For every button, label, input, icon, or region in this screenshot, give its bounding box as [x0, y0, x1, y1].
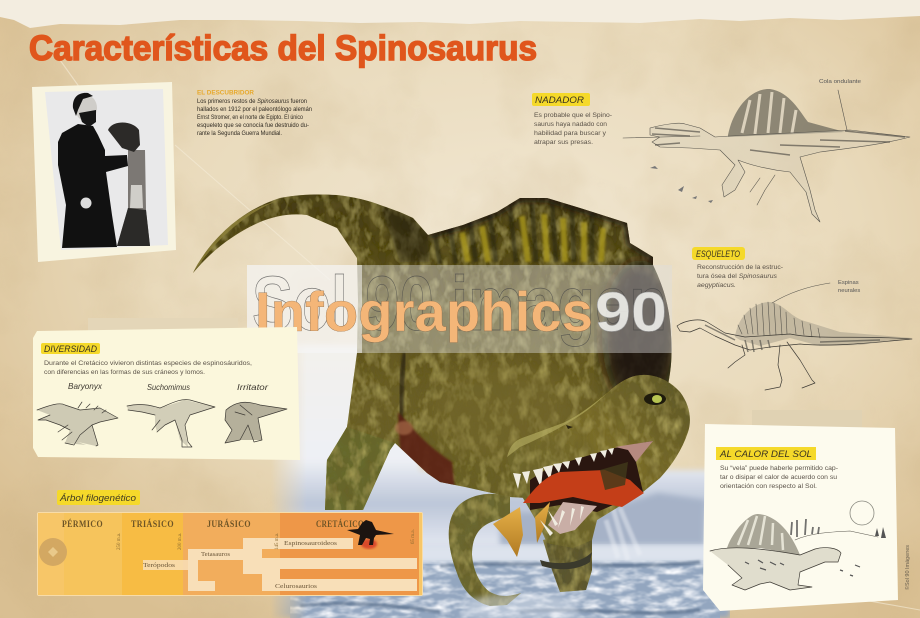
splash	[460, 594, 580, 618]
mouth interior	[530, 441, 652, 512]
man in black coat	[58, 124, 128, 248]
era labels: PÉRMICO	[62, 519, 103, 529]
heading: Árbol filogenético: Árbol filogenético	[59, 493, 136, 504]
text block: El descubridor: rante la Segunda Guerra Mundial.	[197, 130, 282, 137]
chart: phylogenetic tree: CRETÁCICO	[316, 519, 364, 529]
time labels: 250 m.a.	[117, 533, 122, 550]
text block: El descubridor: Los primeros restos de Spinosaurus fueron	[197, 98, 307, 105]
text: Nadador: Es probable que el Spino-	[534, 112, 612, 119]
text: Diversidad: con diferencias en las formas de sus cráneos y lomos.	[44, 369, 205, 376]
text: Diversidad: Durante el Cretácico vivieron distintas especies de espinosáuridos,	[44, 360, 252, 367]
chart: phylogenetic tree: Tetasauros	[201, 551, 230, 558]
fish fins	[493, 507, 523, 557]
pointer line	[772, 283, 830, 303]
clade labels: Espinosauroideos	[284, 540, 337, 547]
icon: sun	[850, 501, 874, 525]
watermark: Sol 90 imagen	[252, 261, 667, 347]
chart: phylogenetic tree: Celurosaurios	[275, 583, 317, 590]
label: Esqueleto: ESQUELETO	[696, 249, 740, 259]
label: Esqueleto	[692, 247, 745, 260]
species: Irritator	[225, 383, 287, 443]
text: Nadador: habilidad para buscar y	[534, 130, 607, 137]
watermark: 90	[595, 280, 667, 343]
text: Esqueleto: aegyptiacus.	[697, 282, 736, 289]
sketch: swimming Spinosaurus	[623, 89, 910, 222]
icon: Spinosaurus silhouette	[347, 520, 394, 549]
species: Baryonyx	[37, 381, 118, 446]
upper teeth	[513, 448, 614, 489]
text block: El descubridor: Ernst Stromer, en el norte de Egipto. El único	[197, 114, 303, 121]
text: Esqueleto	[697, 264, 783, 289]
scene: sky, mountains and water	[270, 345, 730, 618]
panel: Diversidad	[33, 318, 300, 460]
text block: El descubridor: esqueleto que se conocía fue destruido du-	[197, 122, 309, 129]
text: Diversidad	[44, 360, 252, 376]
text: Esqueleto: tura ósea del Spinosaurus	[697, 273, 778, 280]
icon: decorative circle	[39, 538, 67, 566]
fossil bone	[117, 150, 150, 246]
lower teeth	[540, 506, 584, 536]
sketch: skeleton	[677, 283, 912, 390]
illustration: Spinosaurus	[193, 194, 690, 618]
lower leg in water	[543, 530, 592, 592]
hind leg	[325, 427, 395, 510]
label: Nadador	[532, 93, 590, 106]
species: Irritator: Irritator	[237, 383, 268, 392]
branches	[143, 538, 417, 591]
chart: phylogenetic tree: TRIÁSICO	[131, 519, 174, 529]
species: Suchomimus	[127, 382, 215, 447]
body shading, clipped to the silhouette	[193, 198, 678, 490]
tail and body	[193, 194, 672, 510]
text block: El descubridor: EL DESCUBRIDOR	[197, 90, 254, 96]
photo: the discoverer	[32, 82, 176, 262]
label: Nadador: NADADOR	[535, 95, 585, 105]
credit: ©Sol 90 Imágenes	[904, 544, 911, 590]
text: Nadador: atrapar sus presas.	[534, 139, 593, 146]
panel: Al calor del Sol	[703, 410, 898, 611]
text: Al calor del Sol	[720, 465, 838, 490]
panel: Nadador	[532, 79, 910, 222]
annotation: Espinas neurales	[838, 280, 860, 294]
watermark: Infographics	[255, 280, 593, 343]
eye	[644, 393, 666, 405]
chart: phylogenetic tree: Terópodos	[143, 562, 175, 569]
chart: phylogenetic tree: 65 m.a.	[411, 529, 416, 544]
arm	[449, 494, 521, 606]
panel: Esqueleto	[677, 247, 912, 390]
text: Al calor del Sol: tar o disipar el calor de acuerdo con su	[720, 474, 837, 481]
annotation: Cola ondulante: Cola ondulante	[819, 79, 861, 85]
label: Al calor del Sol	[716, 447, 816, 460]
chart: phylogenetic tree: 200 m.a.	[178, 533, 183, 550]
text: Al calor del Sol: Su “vela” puede haberle permitido cap-	[720, 465, 838, 472]
species: Suchomimus: Suchomimus	[147, 382, 191, 392]
fish prey	[523, 470, 644, 507]
heading: Árbol filogenético	[57, 490, 140, 505]
torn paper top band	[0, 0, 920, 28]
label: Diversidad: DIVERSIDAD	[44, 344, 97, 354]
chart: phylogenetic tree: JURÁSICO	[207, 519, 251, 529]
text: Nadador	[534, 112, 612, 146]
text block: El descubridor: hallados en 1912 por el paleontólogo alemán	[197, 106, 312, 113]
species: Baryonyx: Baryonyx	[68, 381, 103, 391]
annotation: Espinas neurales: neurales	[838, 288, 860, 294]
title: Características del Spinosaurus	[29, 29, 537, 68]
annotation: Espinas neurales: Espinas	[838, 280, 859, 286]
chart: phylogenetic tree: 145 m.a.	[275, 533, 280, 550]
label: Al calor del Sol: AL CALOR DEL SOL	[719, 449, 812, 459]
head	[507, 375, 690, 548]
sketch: resting Spinosaurus	[710, 514, 886, 590]
text: Esqueleto: Reconstrucción de la estruc-	[697, 264, 783, 271]
chart: phylogenetic tree	[37, 512, 423, 596]
text: Nadador: saurus haya nadado con	[534, 121, 607, 128]
text: Al calor del Sol: orientación con respecto al Sol.	[720, 483, 817, 490]
text block: El descubridor	[197, 90, 312, 137]
